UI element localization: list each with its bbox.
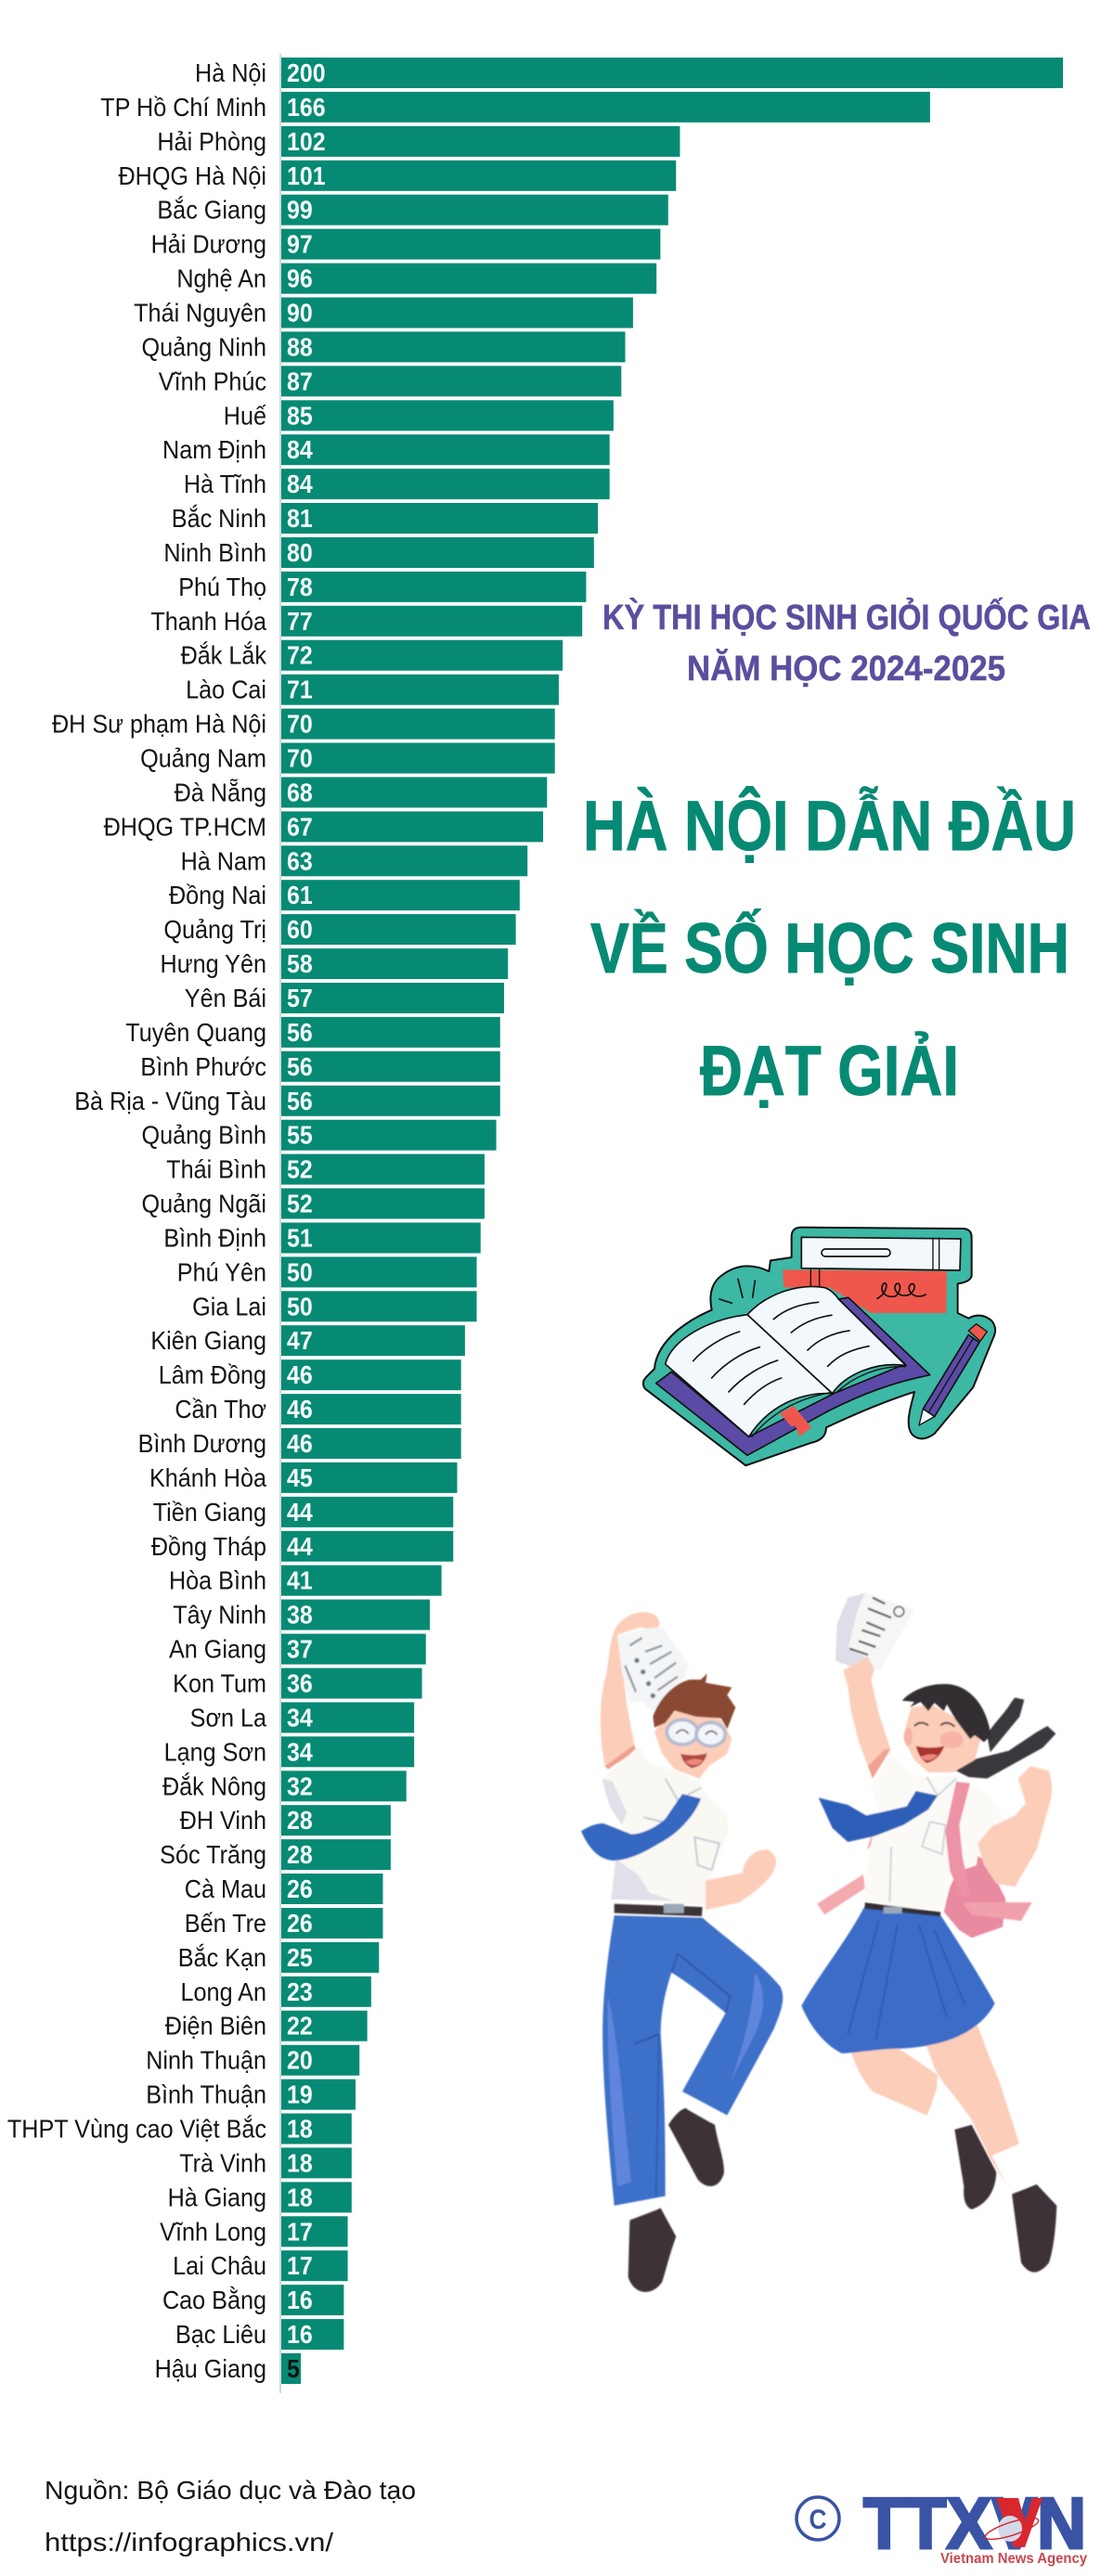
- row: Gia Lai: 50: [287, 1292, 313, 1321]
- row: Hà Tĩnh: 84: [287, 470, 313, 498]
- row: Hải Dương: 97: [287, 229, 313, 259]
- row: Lâm Đồng: 46: [287, 1360, 313, 1390]
- row: Yên Bái: [185, 983, 504, 1013]
- row: Quảng Ngãi: 52: [287, 1189, 313, 1218]
- row: Phú Thọ: [178, 572, 586, 602]
- row: Hà Nam: [181, 845, 527, 876]
- row: Quảng Ngãi: Quảng Ngãi: [142, 1189, 266, 1218]
- row: ĐH Sư phạm Hà Nội: [52, 709, 555, 740]
- icon: open book with stacked books and pencil: [643, 1228, 995, 1465]
- row: Quảng Trị: [163, 914, 516, 945]
- row: An Giang: An Giang: [169, 1634, 266, 1664]
- row: Đồng Nai: Đồng Nai: [169, 881, 266, 910]
- row: Phú Yên: Phú Yên: [177, 1257, 266, 1287]
- row: Nam Định: [162, 434, 610, 465]
- row: Kiên Giang: Kiên Giang: [150, 1326, 266, 1356]
- row: Bắc Giang: 99: [287, 195, 313, 225]
- row: Bắc Ninh: [172, 503, 598, 534]
- row: Hà Giang: Hà Giang: [168, 2183, 266, 2212]
- row: Vĩnh Long: 17: [287, 2217, 313, 2247]
- row: THPT Vùng cao Việt Bắc: THPT Vùng cao Việt Bắc: [7, 2114, 266, 2144]
- row: Thanh Hóa: [150, 606, 582, 637]
- row: Long An: 23: [287, 1977, 313, 2006]
- row: Thái Nguyên: Thái Nguyên: [134, 298, 266, 328]
- row: Đà Nẵng: [175, 777, 547, 807]
- row: Hải Phòng: Hải Phòng: [157, 127, 266, 156]
- title: ĐẠT GIẢI: [700, 1032, 959, 1111]
- row: Tây Ninh: [173, 1600, 430, 1630]
- row: Quảng Ninh: 88: [287, 332, 313, 362]
- row: ĐHQG Hà Nội: ĐHQG Hà Nội: [118, 161, 266, 190]
- row: Hà Nội: Hà Nội: [195, 58, 266, 87]
- row: Hà Tĩnh: Hà Tĩnh: [184, 470, 266, 498]
- row: Bà Rịa - Vũng Tàu: 56: [287, 1086, 313, 1115]
- row: ĐHQG Hà Nội: [118, 161, 676, 191]
- row: ĐHQG TP.HCM: [104, 811, 543, 842]
- row: Sóc Trăng: [160, 1839, 391, 1870]
- row: Lai Châu: 17: [287, 2251, 313, 2281]
- row: Sơn La: Sơn La: [190, 1703, 266, 1732]
- row: Sóc Trăng: 28: [287, 1840, 313, 1869]
- row: Hậu Giang: Hậu Giang: [155, 2354, 266, 2383]
- girl: upper body: [817, 1592, 1056, 1938]
- row: Quảng Trị: 60: [287, 915, 313, 944]
- source url: https://infographics.vn/: [45, 2528, 333, 2557]
- row: Sơn La: 34: [287, 1703, 313, 1732]
- row: Thái Bình: Thái Bình: [166, 1154, 266, 1184]
- row: Phú Yên: [177, 1256, 477, 1287]
- row: Cao Bằng: [162, 2285, 343, 2315]
- row: TP Hồ Chí Minh: [100, 92, 930, 122]
- row: An Giang: 37: [287, 1634, 313, 1664]
- row: Tuyên Quang: 56: [287, 1018, 313, 1047]
- row: Lai Châu: [173, 2250, 348, 2281]
- row: Hòa Bình: [169, 1565, 442, 1596]
- row: Ninh Thuận: 20: [287, 2045, 313, 2075]
- row: Sóc Trăng: Sóc Trăng: [160, 1840, 266, 1869]
- row: ĐHQG TP.HCM: 67: [287, 812, 313, 842]
- row: Ninh Bình: 80: [287, 538, 313, 567]
- row: Quảng Bình: [142, 1120, 497, 1151]
- row: Đồng Nai: [169, 880, 520, 910]
- row: Quảng Nam: 70: [287, 743, 313, 773]
- row: ĐH Sư phạm Hà Nội: ĐH Sư phạm Hà Nội: [52, 709, 266, 739]
- row: Hà Nội: [195, 58, 1063, 88]
- title: [583, 786, 1076, 1111]
- row: Long An: [181, 1977, 371, 2007]
- row: Thái Bình: 52: [287, 1154, 313, 1184]
- row: Kon Tum: 36: [287, 1668, 313, 1698]
- row: Trà Vinh: 18: [287, 2148, 313, 2178]
- row: Ninh Thuận: Ninh Thuận: [146, 2045, 266, 2075]
- girl: skirt, legs and shoes: [801, 1902, 1056, 2273]
- row: An Giang: [169, 1634, 426, 1665]
- row: Quảng Ngãi: [142, 1188, 485, 1219]
- row: Quảng Nam: Quảng Nam: [140, 743, 266, 773]
- row: Bình Định: 51: [287, 1223, 313, 1253]
- row: Cà Mau: [185, 1874, 382, 1904]
- row: Hà Nội: 200: [287, 58, 326, 87]
- row: Bình Phước: 56: [287, 1051, 313, 1081]
- row: Trà Vinh: Trà Vinh: [179, 2148, 266, 2178]
- row: Bình Dương: Bình Dương: [138, 1429, 266, 1458]
- row: Bà Rịa - Vũng Tàu: Bà Rịa - Vũng Tàu: [74, 1087, 266, 1115]
- row: Điện Biên: [165, 2011, 368, 2041]
- row: Thanh Hóa: 77: [287, 606, 313, 636]
- row: Phú Thọ: Phú Thọ: [178, 573, 266, 601]
- row: Yên Bái: 57: [287, 984, 313, 1012]
- row: Cao Bằng: 16: [287, 2286, 313, 2314]
- boy: upper body: [581, 1612, 776, 1916]
- row: Cà Mau: Cà Mau: [185, 1874, 266, 1903]
- row: Bến Tre: Bến Tre: [185, 1909, 266, 1938]
- row: Quảng Ninh: Quảng Ninh: [142, 332, 266, 362]
- row: Đà Nẵng: Đà Nẵng: [175, 778, 266, 807]
- row: Hà Tĩnh: [184, 469, 610, 499]
- icon: copyright: C: [810, 2505, 826, 2535]
- row: Vĩnh Phúc: [159, 366, 621, 396]
- row: Lạng Sơn: [164, 1736, 414, 1767]
- row: Điện Biên: 22: [287, 2011, 313, 2041]
- row: Lào Cai: [186, 675, 559, 705]
- row: Yên Bái: Yên Bái: [185, 984, 266, 1012]
- row: Lai Châu: Lai Châu: [173, 2251, 266, 2281]
- row: Hải Phòng: [157, 126, 680, 157]
- row: Lâm Đồng: Lâm Đồng: [159, 1360, 266, 1390]
- row: Quảng Bình: 55: [287, 1120, 313, 1150]
- row: Lạng Sơn: 34: [287, 1737, 313, 1767]
- row: Hậu Giang: 5: [287, 2354, 300, 2383]
- row: Vĩnh Phúc: 87: [287, 367, 313, 396]
- source: Nguồn: Bộ Giáo dục và Đào tạo: [45, 2476, 416, 2505]
- row: Long An: Long An: [181, 1977, 266, 2006]
- row: Thái Nguyên: [134, 297, 633, 328]
- row: Tiền Giang: Tiền Giang: [153, 1498, 266, 1526]
- row: Hưng Yên: [161, 948, 508, 979]
- row: Nam Định: Nam Định: [162, 435, 266, 465]
- row: Tuyên Quang: [125, 1017, 500, 1048]
- row: ĐH Vinh: ĐH Vinh: [180, 1806, 266, 1835]
- row: Ninh Thuận: [146, 2045, 359, 2076]
- row: Hà Nam: 63: [287, 846, 313, 876]
- row: Kon Tum: Kon Tum: [173, 1668, 266, 1698]
- row: Đắk Nông: 32: [287, 1771, 313, 1801]
- row: Bạc Liêu: [175, 2319, 343, 2350]
- row: Bà Rịa - Vũng Tàu: [74, 1086, 500, 1116]
- row: Nghệ An: [176, 264, 656, 294]
- row: Bắc Kạn: 25: [287, 1943, 313, 1972]
- row: Bình Dương: 46: [287, 1429, 313, 1458]
- row: Bình Phước: [140, 1051, 500, 1082]
- row: Vĩnh Long: [160, 2216, 348, 2247]
- subtitle: NĂM HỌC 2024-2025: [687, 648, 1005, 689]
- row: Gia Lai: Gia Lai: [192, 1292, 266, 1321]
- row: Tiền Giang: 44: [287, 1498, 313, 1526]
- row: Kiên Giang: [150, 1325, 465, 1356]
- row: Hải Phòng: 102: [287, 127, 326, 156]
- row: Nghệ An: 96: [287, 264, 313, 293]
- row: Hà Giang: [168, 2182, 352, 2212]
- row: Ninh Bình: Ninh Bình: [163, 538, 266, 567]
- row: Quảng Bình: Quảng Bình: [142, 1120, 266, 1150]
- row: Đồng Tháp: [151, 1531, 453, 1562]
- row: Bình Định: [163, 1223, 481, 1253]
- row: Thái Nguyên: 90: [287, 298, 313, 328]
- row: Huế: [224, 400, 614, 431]
- row: Kiên Giang: 47: [287, 1326, 313, 1356]
- row: Tây Ninh: 38: [287, 1600, 313, 1629]
- logo: TTXVN: Vietnam News Agency: [940, 2551, 1087, 2567]
- row: Cần Thơ: 46: [287, 1395, 313, 1423]
- row: Thái Bình: [166, 1154, 485, 1185]
- row: Đắk Lắk: [181, 640, 563, 671]
- row: Cà Mau: 26: [287, 1874, 313, 1903]
- row: Tiền Giang: [153, 1497, 453, 1527]
- row: Đồng Tháp: Đồng Tháp: [151, 1532, 266, 1561]
- row: Hà Giang: 18: [287, 2183, 313, 2212]
- logo: TTXVN: TTXVN: [863, 2482, 1086, 2564]
- row: Bình Thuận: [146, 2080, 356, 2110]
- row: Hà Nam: Hà Nam: [181, 846, 266, 876]
- row: Phú Yên: 50: [287, 1257, 313, 1287]
- row: Đà Nẵng: 68: [287, 778, 313, 807]
- row: Bình Dương: [138, 1428, 461, 1459]
- illustration: boy student jumping: [581, 1612, 783, 2292]
- row: Quảng Ninh: [142, 331, 625, 362]
- row: ĐHQG Hà Nội: 101: [287, 161, 326, 190]
- row: Hòa Bình: Hòa Bình: [169, 1565, 266, 1595]
- row: Lào Cai: Lào Cai: [186, 675, 266, 704]
- row: Bắc Kạn: [178, 1942, 379, 1973]
- row: Đắk Nông: Đắk Nông: [162, 1771, 266, 1801]
- row: Vĩnh Long: Vĩnh Long: [160, 2217, 266, 2247]
- row: Bình Phước: Bình Phước: [140, 1052, 266, 1081]
- row: Hải Dương: [151, 229, 660, 260]
- row: Đồng Tháp: 44: [287, 1531, 313, 1561]
- row: Nam Định: 84: [287, 435, 313, 465]
- row: Khánh Hòa: Khánh Hòa: [149, 1463, 266, 1492]
- row: Gia Lai: [192, 1291, 477, 1321]
- row: Lạng Sơn: Lạng Sơn: [164, 1737, 266, 1767]
- row: TP Hồ Chí Minh: TP Hồ Chí Minh: [100, 93, 266, 122]
- row: Tuyên Quang: Tuyên Quang: [125, 1018, 266, 1047]
- row: Khánh Hòa: [149, 1462, 457, 1493]
- row: Bạc Liêu: 16: [287, 2320, 313, 2349]
- row: Đắk Lắk: Đắk Lắk: [181, 640, 267, 670]
- row: Bình Thuận: 19: [287, 2080, 313, 2109]
- row: Hải Dương: Hải Dương: [151, 229, 266, 259]
- subtitle: [602, 596, 1091, 689]
- row: Trà Vinh: [179, 2147, 352, 2178]
- row: Điện Biên: Điện Biên: [165, 2011, 266, 2041]
- row: Hưng Yên: 58: [287, 949, 313, 978]
- row: Thanh Hóa: Thanh Hóa: [150, 607, 266, 636]
- row: Huế: 85: [287, 401, 313, 431]
- row: ĐH Vinh: 28: [287, 1806, 313, 1835]
- row: Vĩnh Phúc: Vĩnh Phúc: [159, 367, 266, 396]
- row: Bắc Giang: Bắc Giang: [157, 195, 266, 225]
- row: THPT Vùng cao Việt Bắc: 18: [287, 2114, 313, 2144]
- row: Huế: Huế: [224, 401, 266, 431]
- row: Bắc Giang: [157, 195, 668, 225]
- row: ĐH Sư phạm Hà Nội: 70: [287, 709, 313, 739]
- illustration: girl student jumping: [801, 1592, 1056, 2273]
- row: Lào Cai: 71: [287, 675, 313, 704]
- row: Hòa Bình: 41: [287, 1565, 313, 1595]
- row: Bình Thuận: Bình Thuận: [146, 2080, 266, 2109]
- icon: copyright: [797, 2497, 839, 2540]
- row: Phú Thọ: 78: [287, 573, 313, 601]
- row: Đồng Nai: 61: [287, 881, 313, 910]
- row: Bắc Ninh: 81: [287, 504, 313, 533]
- row: Quảng Trị: Quảng Trị: [163, 915, 266, 944]
- row: ĐH Vinh: [180, 1805, 391, 1835]
- row: Cần Thơ: [175, 1394, 461, 1424]
- row: Bến Tre: 26: [287, 1909, 313, 1938]
- row: Hưng Yên: Hưng Yên: [161, 949, 266, 978]
- row: Bạc Liêu: Bạc Liêu: [175, 2320, 266, 2349]
- row: Cao Bằng: Cao Bằng: [162, 2286, 266, 2314]
- row: Bình Định: Bình Định: [163, 1223, 266, 1253]
- row: Sơn La: [190, 1702, 414, 1732]
- row: Khánh Hòa: 45: [287, 1463, 313, 1492]
- row: Cần Thơ: Cần Thơ: [175, 1395, 266, 1423]
- row: TP Hồ Chí Minh: 166: [287, 93, 326, 122]
- row: Đắk Nông: [162, 1771, 407, 1801]
- row: Lâm Đồng: [159, 1359, 461, 1390]
- boy: legs and shoes: [602, 1915, 783, 2292]
- row: Nghệ An: Nghệ An: [176, 264, 266, 293]
- row: Bến Tre: [185, 1908, 382, 1938]
- row: Quảng Nam: [140, 742, 555, 774]
- row: Kon Tum: [173, 1668, 422, 1698]
- row: Ninh Bình: [163, 537, 594, 568]
- row: Đắk Lắk: 72: [287, 640, 313, 670]
- row: ĐHQG TP.HCM: ĐHQG TP.HCM: [104, 812, 266, 842]
- row: Tây Ninh: Tây Ninh: [173, 1600, 266, 1629]
- row: Bắc Ninh: Bắc Ninh: [172, 504, 266, 533]
- row: Bắc Kạn: Bắc Kạn: [178, 1943, 266, 1972]
